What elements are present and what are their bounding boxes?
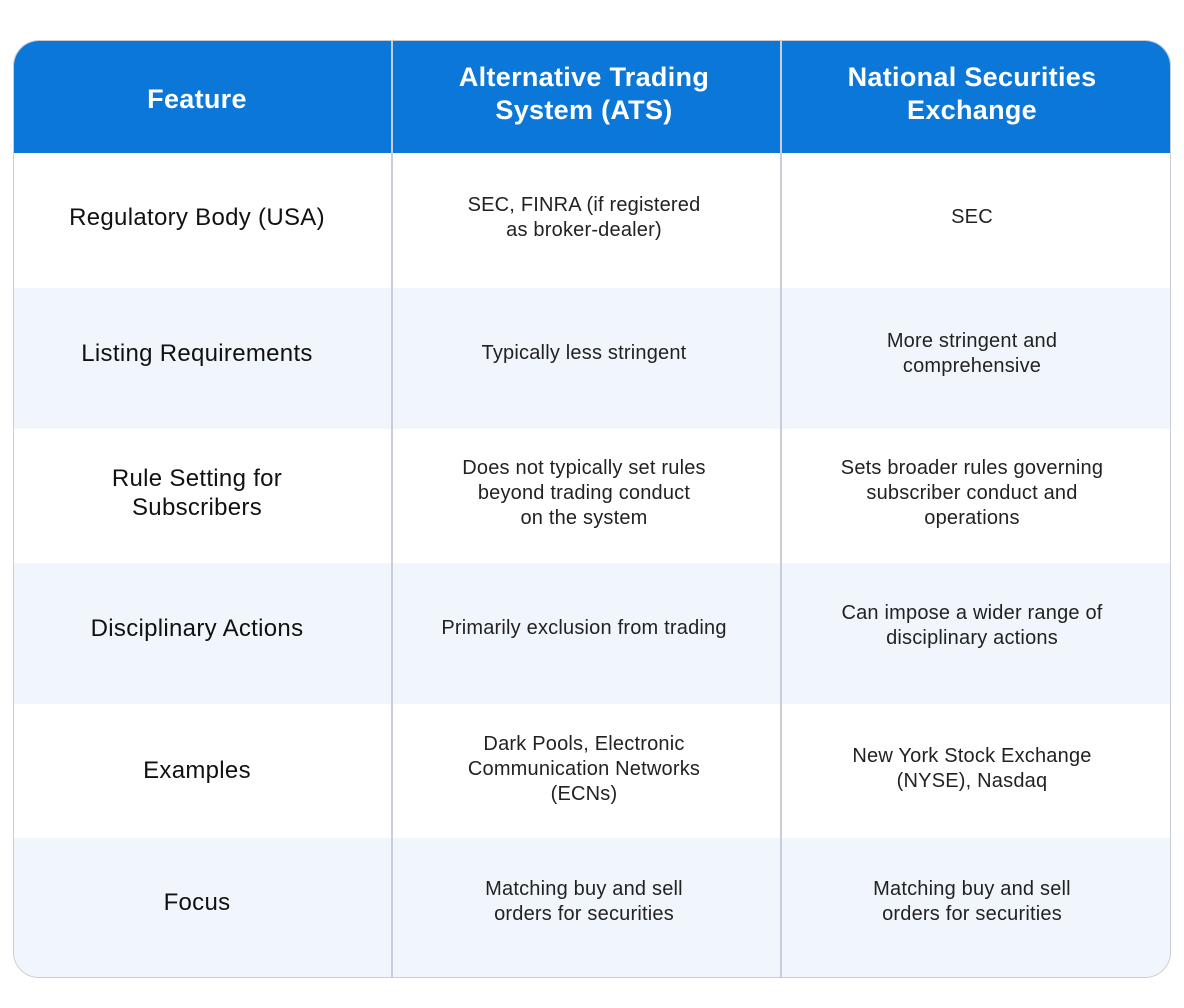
comparison table: disciplinary actions [886,626,1058,648]
row: Focus: Focus [164,888,230,916]
header: Feature: Feature [147,84,247,114]
comparison table: as broker-dealer) [506,218,662,240]
comparison table: orders for securities [882,903,1062,925]
comparison table: SEC, FINRA (if registered [468,194,700,216]
comparison table: Can impose a wider range of [841,602,1103,624]
header: ATS: System (ATS) [495,95,673,125]
comparison table: Matching buy and sell [873,878,1071,900]
comparison table: subscriber conduct and [866,482,1078,504]
header: National Securities Exchange [848,62,1096,125]
row: Rule Setting: Rule Setting for [112,465,282,492]
comparison table: Sets broader rules governing [841,456,1103,478]
comparison table: Typically less stringent [482,342,686,364]
header: National Securities Exchange: National Securities [848,62,1096,92]
comparison table: on the system [520,506,648,528]
row: Listing Requirements: Listing Requirements [81,340,313,367]
comparison table: New York Stock Exchange [852,745,1092,767]
comparison table: (NYSE), Nasdaq [897,770,1047,792]
header: ATS: Alternative Trading [459,62,709,92]
comparison table: More stringent and [887,330,1057,352]
comparison table: Does not typically set rules [462,456,706,478]
row: Regulatory Body: Regulatory Body (USA) [69,204,325,231]
comparison table: comprehensive [903,354,1041,376]
header: National Securities Exchange: Exchange [907,95,1037,125]
header: ATS [459,62,709,125]
comparison table: operations [924,506,1020,528]
row: Examples: Examples [143,756,251,784]
comparison table: (ECNs) [551,782,617,804]
comparison table: Matching buy and sell [485,878,683,900]
header bar [14,41,1170,153]
comparison table: Dark Pools, Electronic [483,732,685,754]
row: Rule Setting: Subscribers [132,494,262,521]
comparison table: beyond trading conduct [478,482,690,504]
comparison table: orders for securities [494,903,674,925]
comparison table: Communication Networks [468,758,700,780]
row: Disciplinary Actions: Disciplinary Actions [91,615,303,642]
comparison table: Primarily exclusion from trading [441,617,727,639]
row: Rule Setting [112,465,282,521]
comparison table: SEC [951,206,993,228]
